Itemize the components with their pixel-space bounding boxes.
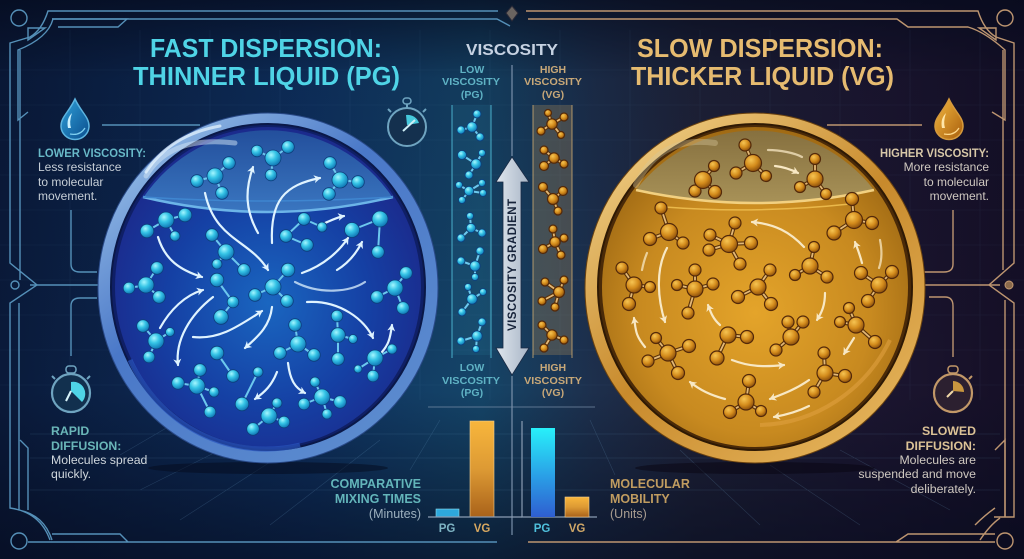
text: lower viscosity [38,146,146,203]
text: lower viscosity: LOWER VISCOSITY: [38,146,146,160]
text: higher viscosity: HIGHER VISCOSITY: [880,146,989,160]
title: slow dispersion [631,35,894,91]
label: low viscosity bottom: (PG) [461,387,483,399]
label: high viscosity top: (VG) [542,89,564,101]
icon: stopwatch top [388,98,426,146]
text: lower viscosity: to molecular [38,175,103,189]
viscosity gradient arrow [496,157,529,375]
label: low viscosity bottom: VISCOSITY [442,375,500,387]
label: low viscosity top [442,64,500,101]
blue sphere: thinner liquid [98,113,438,463]
gold sphere arrows [634,150,881,417]
label: high viscosity top [524,64,582,101]
heading: viscosity: VISCOSITY [466,42,558,59]
chart title: comparative mixing times: MIXING TIMES [335,492,421,506]
high viscosity column [533,105,572,358]
text: higher viscosity [880,146,989,203]
text: slowed diffusion: SLOWED [922,424,976,438]
text: lower viscosity: Less resistance [38,160,122,174]
label: low viscosity bottom [442,362,500,399]
chart title: molecular mobility: (Units) [610,507,647,521]
title: fast dispersion: FAST DISPERSION: [150,35,382,63]
gold sphere molecules [616,139,898,418]
chart title: comparative mixing times: COMPARATIVE [330,477,421,491]
chart title: molecular mobility [610,477,690,521]
top centre diamond [506,6,518,21]
text: rapid diffusion: RAPID [51,424,89,438]
chart: comparative mixing times: VG [474,523,490,535]
viscosity gradient arrow: VISCOSITY GRADIENT [507,199,519,331]
chart title: molecular mobility: MOLECULAR [610,477,690,491]
title: slow dispersion: SLOW DISPERSION: [637,35,883,63]
chart: comparative mixing times [428,421,522,535]
text: slowed diffusion: DIFFUSION: [906,439,976,453]
text: rapid diffusion [51,424,148,481]
label: high viscosity bottom [524,362,582,399]
label: high viscosity bottom: VISCOSITY [524,375,582,387]
low viscosity column [452,105,491,358]
gold sphere: thicker liquid [585,113,925,463]
text: slowed diffusion: suspended and move [858,467,976,481]
chart: molecular mobility [522,421,597,535]
label: high viscosity top: VISCOSITY [524,76,582,88]
label: low viscosity top: VISCOSITY [442,76,500,88]
label: low viscosity top: LOW [460,64,484,76]
blue sphere arrows [158,167,392,399]
icon: stopwatch left [52,366,90,412]
chart: molecular mobility: PG [534,523,550,535]
text: higher viscosity: More resistance [904,160,989,174]
blue sphere molecules [123,141,412,435]
centre divider [511,65,513,535]
text: higher viscosity: movement. [930,189,989,203]
text: slowed diffusion [858,424,976,496]
chart: comparative mixing times: PG [439,523,455,535]
text: slowed diffusion: deliberately. [911,482,976,496]
label: low viscosity bottom: LOW [460,362,484,374]
icon: stopwatch right [934,366,972,412]
title: fast dispersion: THINNER LIQUID (PG) [133,63,400,91]
label: low viscosity top: (PG) [461,89,483,101]
chart title: molecular mobility: MOBILITY [610,492,670,506]
title: fast dispersion [133,35,400,91]
label: high viscosity bottom: (VG) [542,387,564,399]
text: lower viscosity: movement. [38,189,97,203]
blue frame [10,10,510,549]
chart title: comparative mixing times [330,477,421,521]
text: rapid diffusion: quickly. [51,467,91,481]
text: rapid diffusion: DIFFUSION: [51,439,121,453]
text: higher viscosity: to molecular [924,175,989,189]
label: high viscosity top: HIGH [540,64,566,76]
icon: blue water drop [61,99,89,140]
text: rapid diffusion: Molecules spread [51,453,148,467]
icon: gold oil drop [935,99,963,140]
gold frame [526,10,1014,549]
label: high viscosity bottom: HIGH [540,362,566,374]
chart title: comparative mixing times: (Minutes) [369,507,421,521]
title: slow dispersion: THICKER LIQUID (VG) [631,63,894,91]
chart: molecular mobility: VG [569,523,585,535]
text: slowed diffusion: Molecules are [899,453,976,467]
